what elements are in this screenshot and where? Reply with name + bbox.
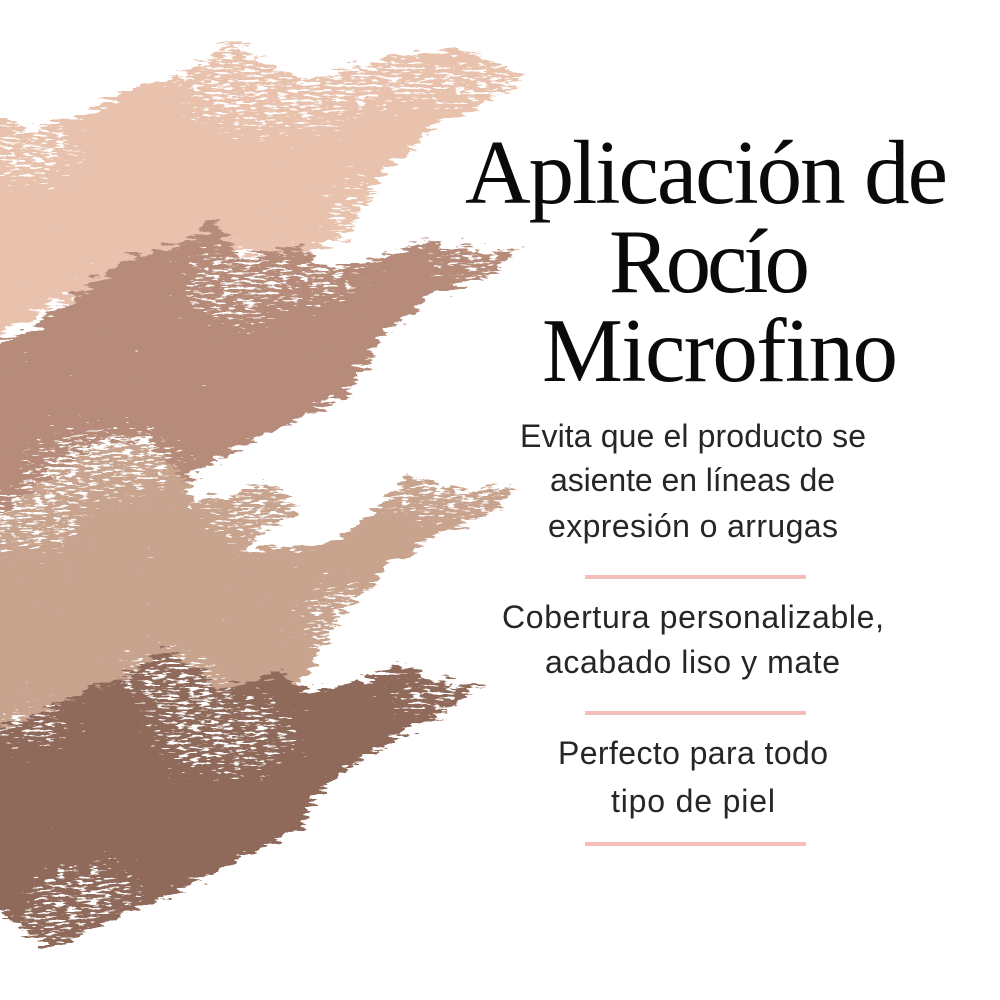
text block: skin type benefit: Perfecto para todo <box>558 735 828 771</box>
text block: skin type benefit <box>558 735 828 819</box>
text block: wrinkle benefit <box>520 418 866 544</box>
swatch stroke: deep brown <box>0 646 495 959</box>
swatch stroke: rose brown <box>0 222 535 558</box>
title: Aplicación de <box>465 122 948 223</box>
swatch stroke: light peach <box>0 34 535 335</box>
text block: coverage benefit <box>502 599 884 680</box>
text block: wrinkle benefit: Evita que el producto se <box>520 418 866 454</box>
text block: skin type benefit: tipo de piel <box>611 783 775 819</box>
text block: coverage benefit: Cobertura personalizable, <box>502 599 884 635</box>
title: Microfino <box>542 300 898 401</box>
title <box>465 122 948 401</box>
title: Rocío <box>609 211 810 312</box>
text block: wrinkle benefit: asiente en líneas de <box>550 462 835 498</box>
text block: wrinkle benefit: expresión o arrugas <box>548 508 838 544</box>
swatch stroke: tan <box>0 440 525 745</box>
text block: coverage benefit: acabado liso y mate <box>545 644 840 680</box>
